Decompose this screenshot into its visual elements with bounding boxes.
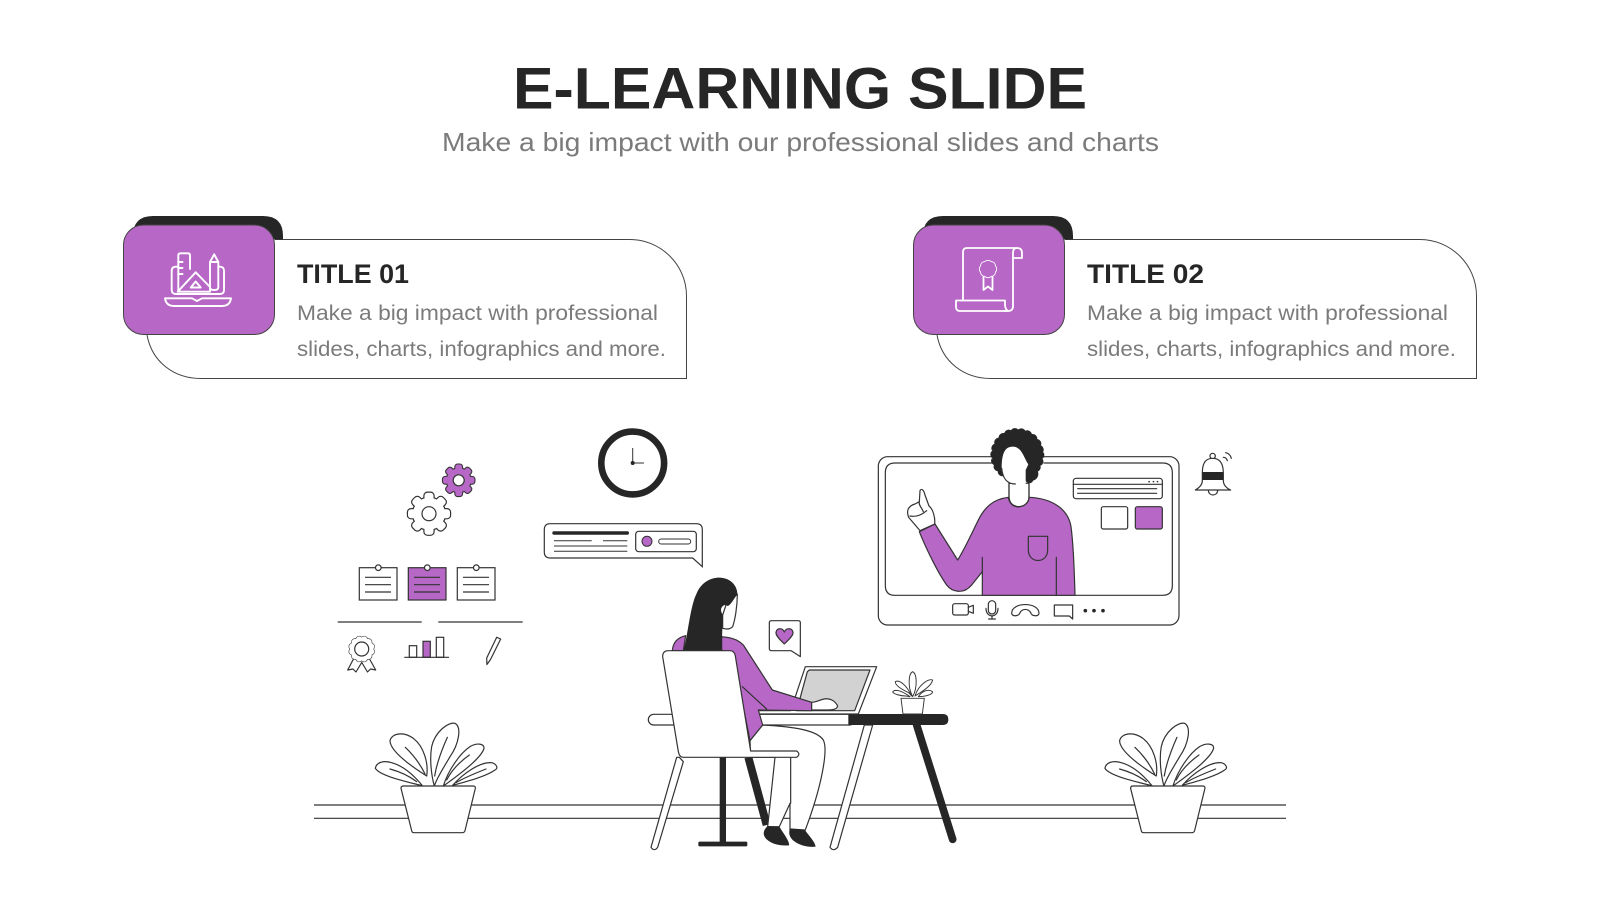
icon: certificate scroll [956, 248, 1022, 311]
slide window [1073, 478, 1162, 499]
purple tile [1135, 507, 1162, 529]
card text [1087, 301, 1456, 361]
card outline [937, 240, 1476, 378]
card outline [147, 240, 686, 378]
chair back leg [748, 757, 767, 825]
chin line [1002, 468, 1015, 484]
subtitle: Make a big impact with our professional slides and charts [442, 127, 1159, 157]
sweater [672, 636, 812, 741]
dark tab [923, 216, 1073, 240]
note left [359, 565, 397, 600]
small plant [893, 672, 933, 714]
title: E-LEARNING SLIDE [513, 56, 1087, 122]
chair [651, 651, 799, 850]
woman at desk scene [648, 578, 953, 850]
card text: slides, charts, infographics and more. [1087, 337, 1456, 361]
icon: notification bell [1195, 453, 1231, 495]
plant right [1105, 723, 1226, 833]
bar chart icon [404, 637, 449, 657]
sweater [919, 497, 1075, 595]
panel: title 02 card [914, 216, 1476, 378]
white tile [1101, 507, 1128, 529]
dark tab [133, 216, 283, 240]
desk top [648, 714, 948, 725]
purple icon tile [914, 225, 1064, 334]
panel: title 01 card [124, 216, 686, 378]
floor lines [314, 805, 1286, 818]
speech bubble with lines [544, 524, 702, 567]
card text: Make a big impact with professional [297, 301, 658, 325]
icon: wall clock [601, 432, 664, 494]
shoes [764, 826, 816, 847]
face [1002, 447, 1028, 484]
video call tablet [878, 432, 1179, 625]
face [723, 594, 737, 629]
card heading: TITLE 01 [297, 259, 409, 289]
heart bubble [769, 621, 800, 657]
tablet frame [878, 457, 1179, 625]
trousers [750, 725, 825, 831]
screen [885, 463, 1172, 595]
laptop [758, 667, 877, 714]
desk legs [830, 725, 953, 850]
hand [812, 699, 838, 710]
icon: pencil [487, 637, 501, 664]
icon: award medal [348, 635, 376, 672]
plant left [375, 723, 497, 833]
card text: Make a big impact with professional [1087, 301, 1448, 325]
card heading: TITLE 02 [1087, 259, 1204, 289]
chair stem [698, 757, 747, 846]
note middle purple [408, 565, 446, 600]
icon: purple gear [443, 465, 474, 496]
icon: white gear [408, 493, 450, 535]
note right [457, 565, 495, 600]
hair [683, 578, 737, 651]
icon: laptop with drawing tools [165, 253, 231, 306]
toolbar icons [953, 601, 1073, 619]
card text: slides, charts, infographics and more. [297, 337, 666, 361]
hair [995, 432, 1040, 483]
card text [297, 301, 666, 361]
shelf dividers [338, 621, 523, 623]
notes row [359, 565, 495, 600]
neck [1009, 483, 1029, 507]
pointing hand [908, 489, 935, 531]
purple icon tile [124, 225, 274, 334]
